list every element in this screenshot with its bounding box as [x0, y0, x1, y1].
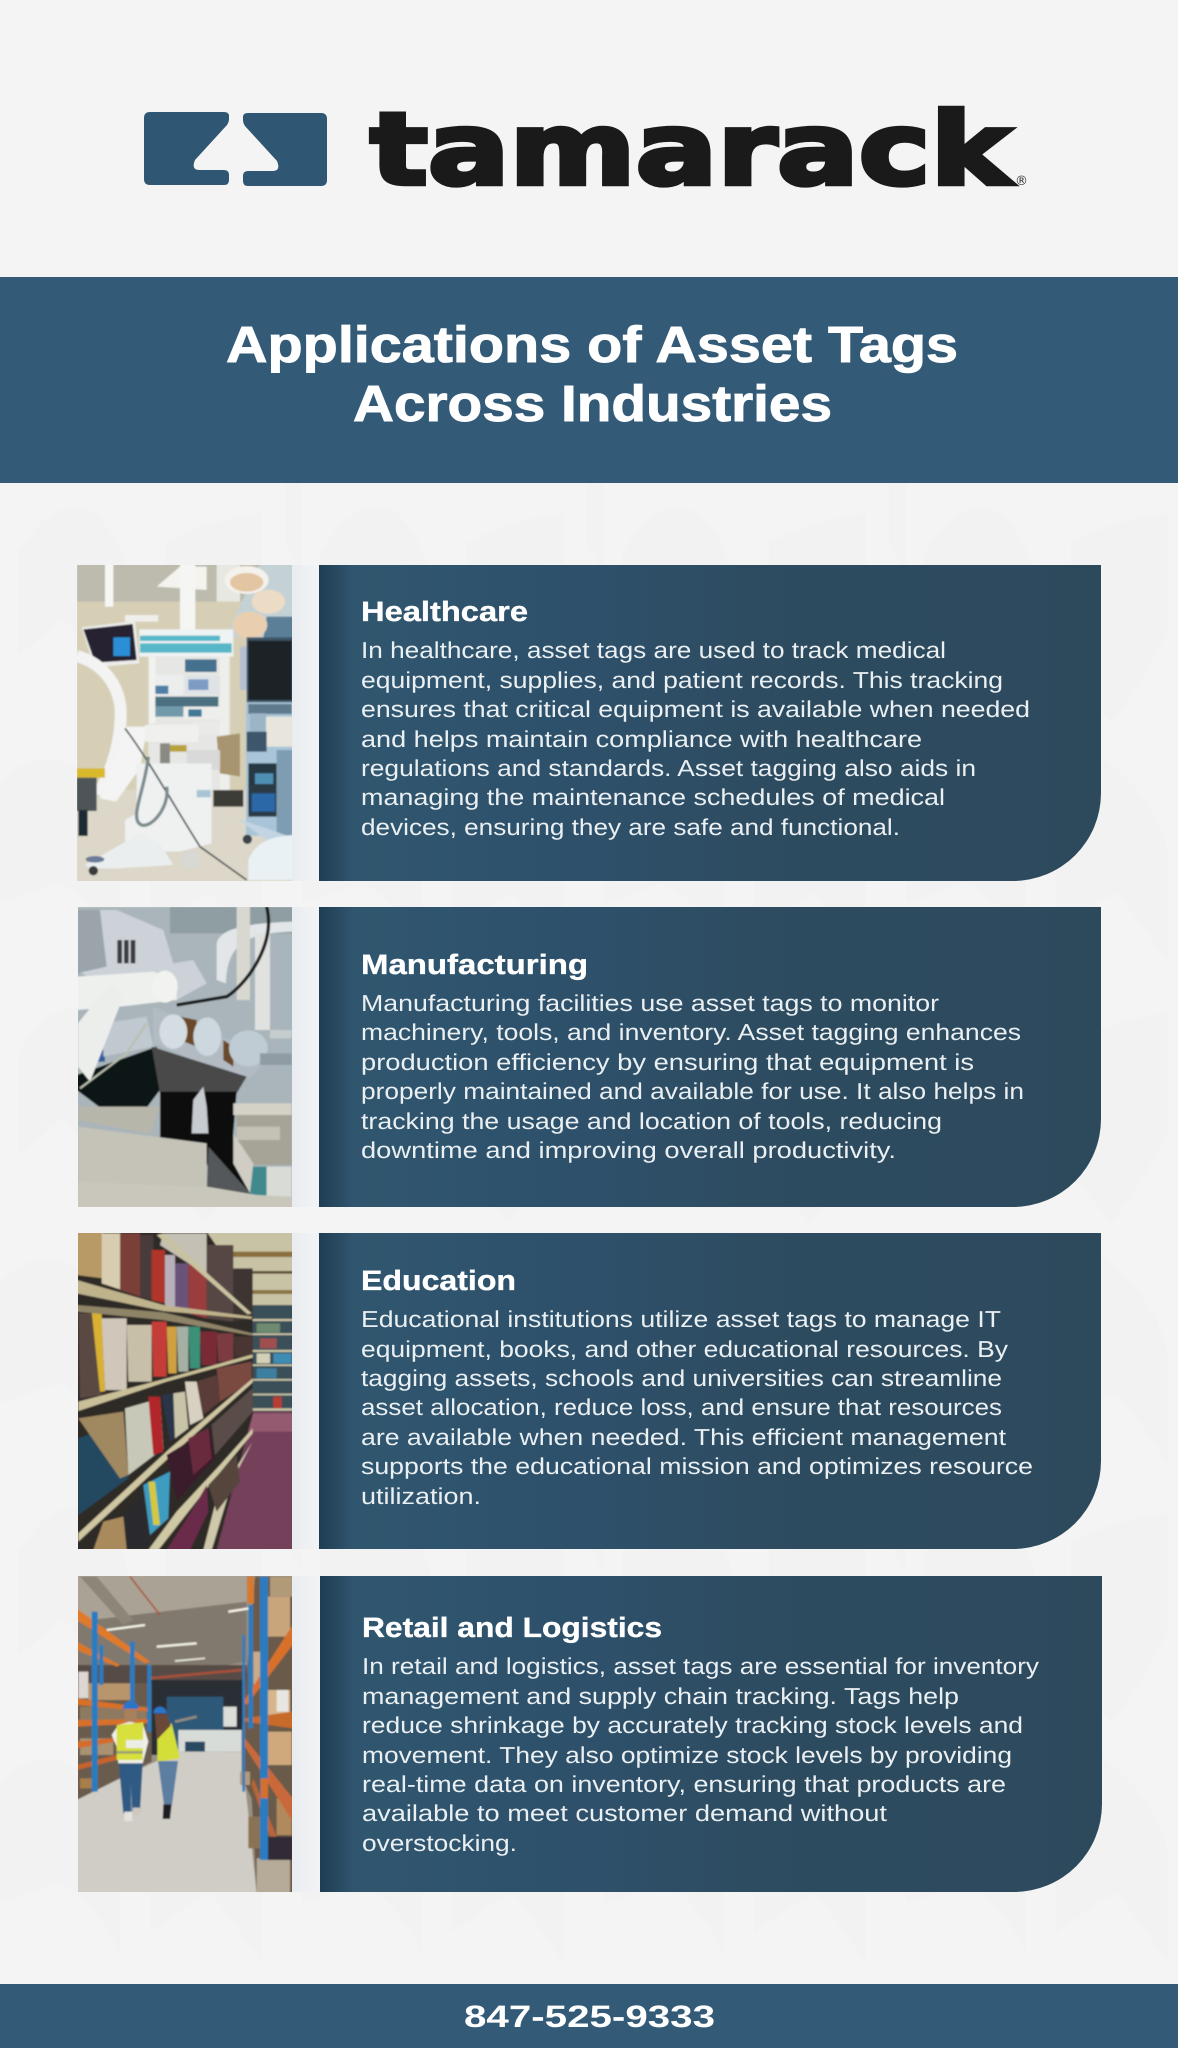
- body text: available to meet customer demand without: [362, 1800, 888, 1826]
- body text: management and supply chain tracking. Tags help: [362, 1683, 959, 1709]
- title: [226, 316, 958, 432]
- panel: retail and logistics: [77, 1575, 1102, 1893]
- body text: tagging assets, schools and universities can streamline: [361, 1365, 1002, 1391]
- card: retail and logistics text: [320, 1576, 1102, 1892]
- body text: In retail and logistics, asset tags are essential for inventory: [362, 1653, 1040, 1679]
- photo: operating room: [77, 563, 293, 883]
- heading: Education: [361, 1265, 516, 1296]
- body text: ensures that critical equipment is available when needed: [361, 696, 1030, 722]
- footer band: [0, 1984, 1178, 2048]
- body text: movement. They also optimize stock levels by providing: [362, 1742, 1012, 1768]
- body text: devices, ensuring they are safe and functional.: [361, 814, 900, 840]
- title: Applications of Asset Tags: [226, 316, 958, 373]
- card: education text: [319, 1233, 1101, 1549]
- heading: Manufacturing: [361, 949, 588, 980]
- card: manufacturing text: [319, 907, 1101, 1207]
- body text: downtime and improving overall productivity.: [361, 1137, 896, 1163]
- body text: [361, 1306, 1033, 1509]
- logo: [144, 91, 1028, 208]
- body text: supports the educational mission and optimizes resource: [361, 1453, 1033, 1479]
- heading: Retail and Logistics: [362, 1612, 662, 1643]
- heading: Healthcare: [361, 596, 528, 627]
- body text: equipment, books, and other educational resources. By: [361, 1336, 1009, 1362]
- body text: and helps maintain compliance with healthcare: [361, 726, 922, 752]
- photo: factory machine: [77, 907, 293, 1208]
- body text: In healthcare, asset tags are used to track medical: [361, 637, 946, 663]
- panel: education: [77, 1232, 1101, 1552]
- panel: healthcare: [77, 563, 1101, 883]
- body text: equipment, supplies, and patient records. This tracking: [361, 667, 1003, 693]
- photo: warehouse workers: [77, 1575, 293, 1893]
- body text: Manufacturing facilities use asset tags to monitor: [361, 990, 939, 1016]
- body text: managing the maintenance schedules of medical: [361, 784, 945, 810]
- background pattern: [0, 483, 1178, 1984]
- registered mark: ®: [1015, 174, 1028, 189]
- panel: manufacturing: [77, 907, 1101, 1208]
- body text: tracking the usage and location of tools, reducing: [361, 1108, 942, 1134]
- title band: [0, 277, 1178, 483]
- body text: [361, 990, 1024, 1163]
- title: Across Industries: [353, 375, 832, 432]
- body text: properly maintained and available for use. It also helps in: [361, 1078, 1024, 1104]
- body text: regulations and standards. Asset tagging also aids in: [361, 755, 976, 781]
- card: healthcare text: [319, 565, 1101, 881]
- body text: production efficiency by ensuring that equipment is: [361, 1049, 974, 1075]
- body text: utilization.: [361, 1483, 481, 1509]
- phone number: 847-525-9333: [464, 1999, 715, 2034]
- body text: overstocking.: [362, 1830, 517, 1856]
- body text: asset allocation, reduce loss, and ensure that resources: [361, 1394, 1002, 1420]
- body text: Educational institutions utilize asset tags to manage IT: [361, 1306, 1001, 1332]
- photo: library shelves: [77, 1232, 293, 1552]
- body text: real-time data on inventory, ensuring that products are: [362, 1771, 1006, 1797]
- body text: machinery, tools, and inventory. Asset tagging enhances: [361, 1019, 1021, 1045]
- body text: [361, 637, 1030, 840]
- icon: logo mark: [144, 112, 327, 186]
- body text: [362, 1653, 1040, 1856]
- body text: are available when needed. This efficient management: [361, 1424, 1007, 1450]
- logo wordmark: tamarack: [370, 91, 1014, 208]
- body text: reduce shrinkage by accurately tracking stock levels and: [362, 1712, 1023, 1738]
